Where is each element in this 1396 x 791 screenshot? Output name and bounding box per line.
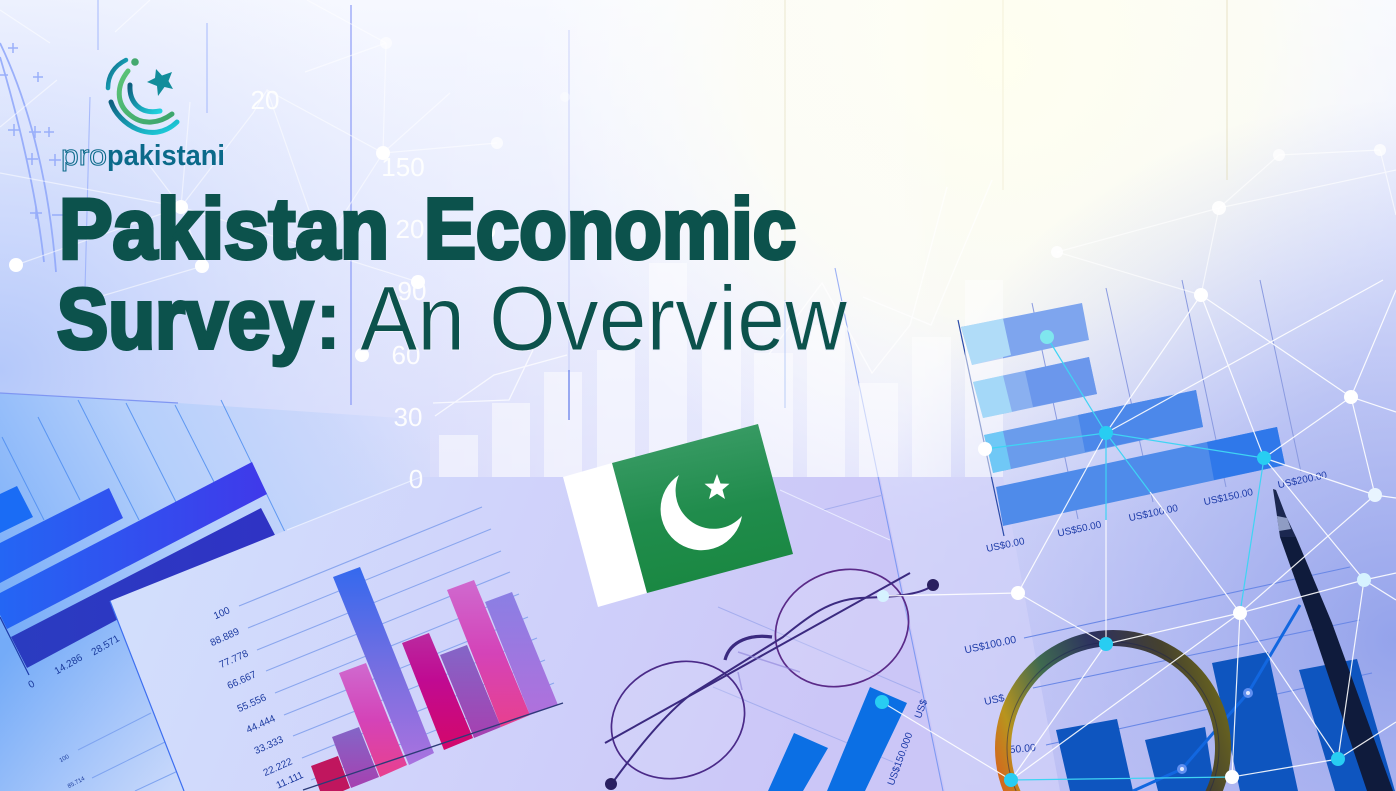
chart value labels: 55.556: [236, 692, 269, 715]
decorative upper-left curves: [0, 0, 207, 290]
axis labels: left chart: 0: [27, 678, 37, 691]
axis labels: left chart: 14.286: [53, 652, 85, 677]
chart value labels: 77.778: [218, 648, 251, 671]
chart value labels: 11.111: [275, 770, 306, 791]
paper: lower-left small chart: [59, 713, 180, 791]
paper: right side chart edges: [713, 268, 1060, 791]
bar chart axis labels: US$200.00: [1277, 470, 1329, 491]
y axis labels: 20: [396, 214, 424, 244]
paper: lower-left small chart: 85.714: [67, 776, 87, 790]
crescent: [661, 475, 742, 550]
logo: [61, 58, 225, 172]
column chart: bottom centre: US$: [913, 698, 930, 720]
chart bars: indigo horizontal: [0, 462, 275, 668]
chart value labels: 44.444: [245, 713, 278, 736]
cyan links over charts: [985, 337, 1264, 780]
Pakistan flag: [563, 424, 793, 607]
column chart: bottom right: US$: [983, 692, 1006, 708]
axis labels: left chart: [27, 633, 122, 691]
column chart: bottom right: US$100.00: [963, 634, 1017, 656]
bar chart axis labels: US$0.00: [985, 536, 1026, 555]
bar chart axis labels: US$100.00: [1128, 503, 1180, 524]
logo mark: [108, 58, 177, 132]
bar chart axis labels: [985, 470, 1329, 555]
faint line chart: [433, 180, 992, 416]
chart value labels: 88.889: [209, 626, 242, 649]
column chart: bottom right: [963, 567, 1395, 791]
pale cyan ends of bar chart: [961, 318, 1012, 473]
bar chart axis labels: US$50.00: [1057, 519, 1103, 540]
y axis labels: 0: [409, 464, 423, 494]
pen: [1273, 489, 1393, 791]
y axis labels: 150: [381, 152, 425, 182]
vertical scratch lines: [351, 0, 1227, 420]
column chart: bottom right: 50.00: [1009, 742, 1037, 756]
magnifying ring: [995, 630, 1231, 791]
paper: front column chart: [110, 477, 945, 791]
paper: lower-left small chart: 100: [59, 754, 71, 764]
column chart: bottom centre: [768, 687, 930, 791]
y axis labels: 20: [251, 85, 279, 115]
y axis labels: 60: [392, 340, 420, 370]
axis labels: left chart: 28.571: [90, 633, 122, 658]
logo wordmark: pro: [61, 140, 107, 172]
chart value labels: [209, 605, 306, 791]
title: Economic: [424, 182, 796, 277]
top-right horizontal bar chart: [958, 280, 1329, 555]
eyeglasses: [594, 550, 939, 791]
title: Survey: [57, 272, 313, 367]
star: [704, 474, 730, 499]
title: :: [314, 273, 342, 368]
title: [57, 182, 848, 370]
y axis labels: [251, 85, 426, 494]
chart value labels: 100: [212, 605, 232, 622]
y axis labels: 30: [394, 402, 422, 432]
chart value labels: 22.222: [262, 756, 295, 779]
chart value labels: 33.333: [253, 734, 286, 757]
logo: pakistani: [107, 140, 225, 172]
title: An Overview: [360, 268, 848, 370]
title: Pakistan: [59, 182, 389, 277]
chart value labels: 66.667: [226, 669, 259, 692]
pale veil over centre: [425, 0, 955, 477]
bar chart axis labels: US$150.00: [1203, 487, 1255, 508]
y axis labels: 90: [398, 276, 426, 306]
paper: upper-left bar chart: [0, 393, 430, 791]
column chart: bottom centre: US$150.000: [886, 731, 915, 787]
chart columns: [311, 567, 558, 791]
faded background column chart: [251, 85, 1003, 494]
